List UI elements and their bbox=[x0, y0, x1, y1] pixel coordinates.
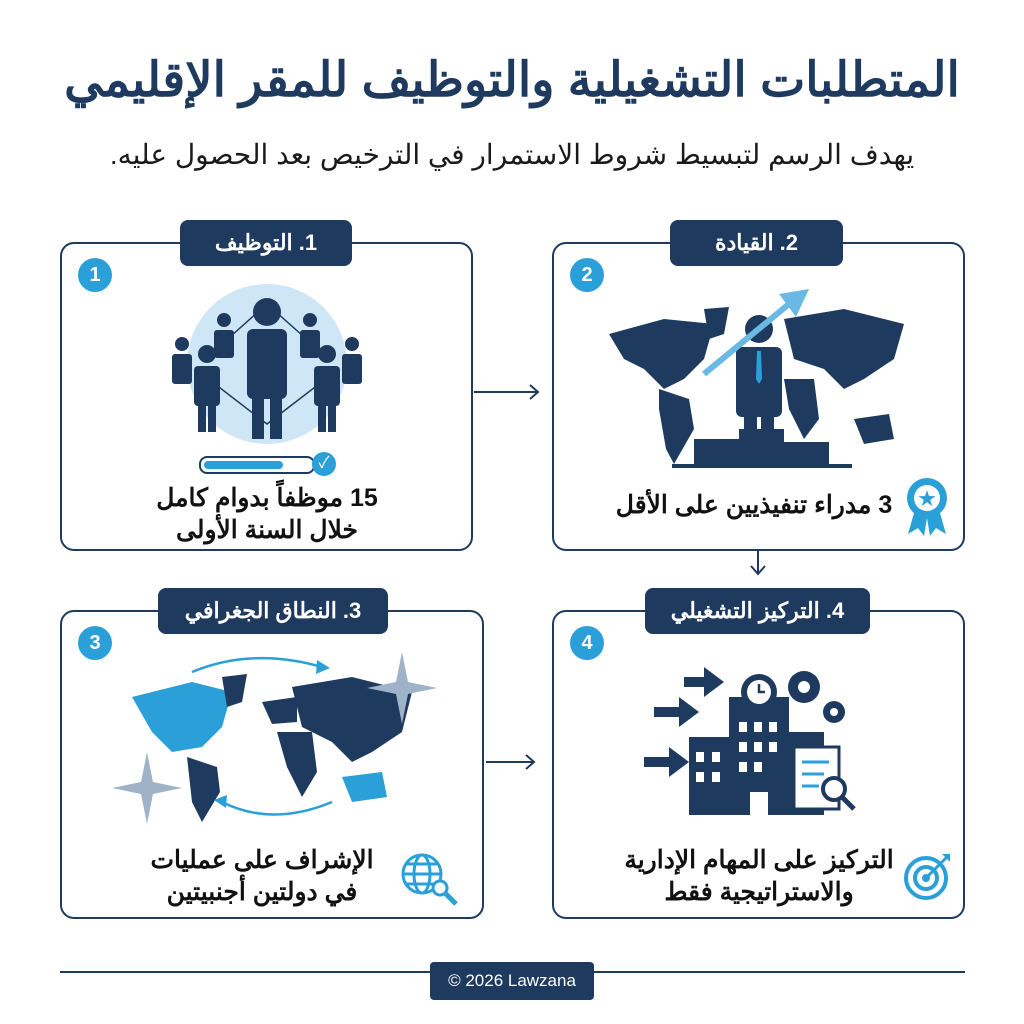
panel: geographic scope bbox=[60, 610, 484, 919]
tab 1: 1. التوظيف bbox=[215, 230, 317, 255]
icon: team bbox=[172, 284, 362, 444]
footer badge: © 2026 Lawzana bbox=[448, 971, 576, 990]
progress bar bbox=[199, 456, 315, 474]
caption: 3 مدراء تنفيذيين على الأقل bbox=[616, 491, 892, 519]
caption bbox=[624, 846, 894, 906]
tab 1 bbox=[180, 220, 352, 266]
tab 3 bbox=[158, 588, 388, 634]
caption: 15 موظفاً بدوام كامل bbox=[156, 484, 378, 512]
tab 3: 3. النطاق الجغرافي bbox=[185, 598, 361, 623]
footer badge bbox=[430, 962, 594, 1000]
number badge 1 bbox=[78, 258, 112, 292]
number badge 2 bbox=[570, 258, 604, 292]
icon: globe search bbox=[402, 854, 458, 906]
icon: award ribbon bbox=[907, 478, 947, 536]
panel: leadership bbox=[552, 242, 965, 551]
number badge 3: 3 bbox=[89, 632, 101, 654]
tab 4: 4. التركيز التشغيلي bbox=[671, 598, 844, 623]
icon: world map with arrows bbox=[112, 652, 437, 824]
caption: في دولتين أجنبيتين bbox=[167, 878, 357, 906]
tab 2 bbox=[670, 220, 843, 266]
number badge 4 bbox=[570, 626, 604, 660]
caption: خلال السنة الأولى bbox=[176, 516, 358, 544]
caption bbox=[156, 479, 378, 544]
tab 2: 2. القيادة bbox=[715, 230, 798, 255]
title: المتطلبات التشغيلية والتوظيف للمقر الإقليمي bbox=[64, 54, 960, 107]
icon: target bbox=[904, 854, 950, 900]
number badge 1: 1 bbox=[89, 264, 101, 286]
subtitle: يهدف الرسم لتبسيط شروط الاستمرار في الترخيص بعد الحصول عليه. bbox=[110, 139, 914, 170]
icon: check: ✓ bbox=[319, 455, 329, 472]
number badge 3 bbox=[78, 626, 112, 660]
caption: التركيز على المهام الإدارية bbox=[624, 846, 894, 874]
icon: world map leader bbox=[609, 289, 904, 468]
caption bbox=[150, 846, 374, 906]
panel: employment bbox=[60, 242, 473, 551]
caption: الإشراف على عمليات bbox=[150, 846, 374, 874]
arrow: 3 to 4 bbox=[486, 754, 536, 770]
number badge 2: 2 bbox=[581, 264, 593, 286]
arrow: 1 to 2 bbox=[474, 384, 540, 400]
panel: operational focus bbox=[552, 610, 965, 919]
number badge 4: 4 bbox=[581, 632, 593, 654]
icon: check bbox=[312, 452, 336, 476]
caption: والاستراتيجية فقط bbox=[664, 878, 854, 906]
icon: award ribbon: ★ bbox=[918, 489, 936, 509]
icon: building with gears bbox=[644, 667, 856, 815]
tab 4 bbox=[645, 588, 870, 634]
arrow: 2 to 4 bbox=[750, 551, 766, 576]
